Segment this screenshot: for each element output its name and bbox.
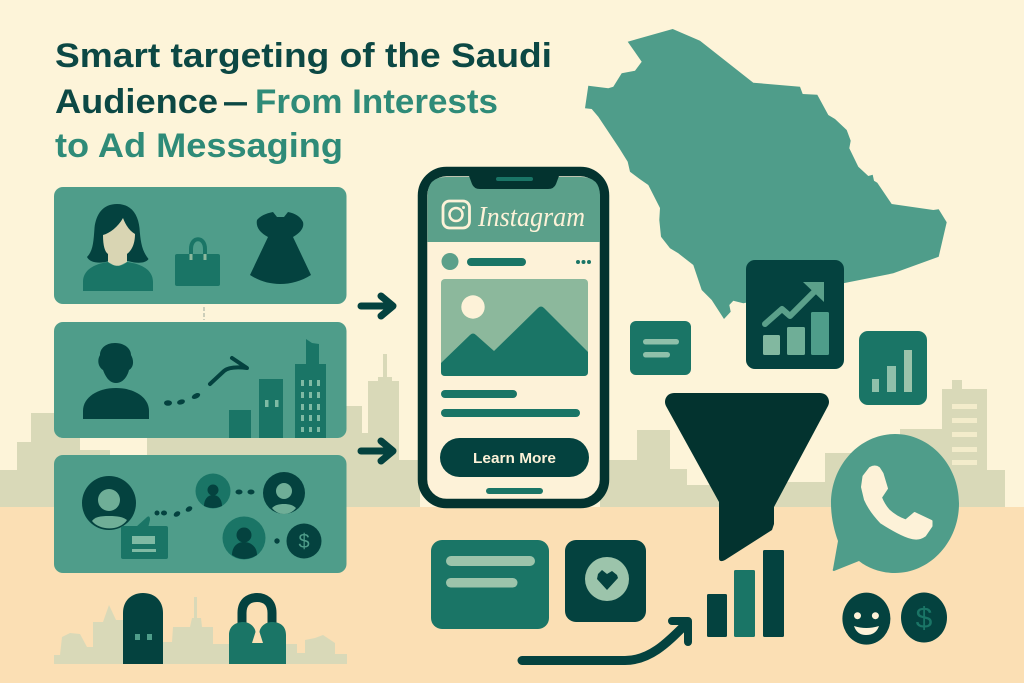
icon: funnel (665, 393, 829, 561)
card: text message (630, 321, 691, 375)
icon: woman (83, 204, 153, 291)
post header (442, 253, 591, 270)
icon: man (83, 343, 149, 419)
card: small bar chart (859, 331, 927, 405)
panel: audience network (54, 455, 346, 573)
title: From Interests (255, 83, 498, 121)
icon: phone handset (862, 466, 932, 539)
post image (441, 279, 588, 376)
card: heart (565, 540, 646, 622)
map of Saudi Arabia (585, 29, 947, 319)
card: text block (431, 540, 549, 629)
panel: interests (54, 187, 346, 304)
button: learn more (440, 438, 589, 477)
dashed flight arrow (164, 358, 247, 406)
avatar: medium teal (222, 516, 266, 560)
icon: dollar coin large (901, 592, 947, 642)
icon: whatsapp bubble (831, 434, 959, 573)
icon: dollar coin (286, 524, 322, 558)
icon: message card (121, 516, 168, 559)
arrow: top panels to phone (361, 296, 393, 316)
avatar: dark (263, 472, 305, 514)
icon: dollar coin large: $ (916, 602, 933, 635)
panel: location (54, 322, 346, 438)
instagram header (428, 176, 600, 242)
icon: dollar coin: $ (298, 531, 310, 553)
icon: padlock (229, 598, 286, 664)
icon: smiley (842, 593, 890, 645)
background skyline (0, 354, 1005, 507)
avatar: small teal (196, 474, 230, 508)
home bar (486, 488, 543, 494)
icon: dress (250, 212, 311, 284)
title (55, 37, 552, 165)
avatar: large (82, 476, 136, 530)
card: growth chart (746, 260, 844, 369)
connector between panels (203, 307, 205, 320)
icon: shopping bag (175, 239, 220, 286)
dotted connectors (154, 490, 280, 544)
phone mockup (422, 172, 604, 504)
caption lines (441, 390, 580, 417)
small skyline (54, 597, 347, 664)
bar chart: results (707, 550, 784, 637)
arrow: location panel to phone (361, 441, 393, 461)
icon: door (123, 593, 163, 664)
button: learn more: Learn More (473, 450, 556, 467)
title: Audience (55, 83, 218, 121)
bottom city with door and lock (54, 593, 347, 664)
icon: instagram logo (443, 201, 470, 228)
instagram wordmark: Instagram (477, 202, 585, 233)
icon: city buildings (229, 339, 326, 438)
title: Smart targeting of the Saudi (55, 37, 552, 75)
title: — (224, 83, 247, 121)
title: to Ad Messaging (55, 127, 343, 165)
arrow: rising to chart (522, 621, 688, 660)
